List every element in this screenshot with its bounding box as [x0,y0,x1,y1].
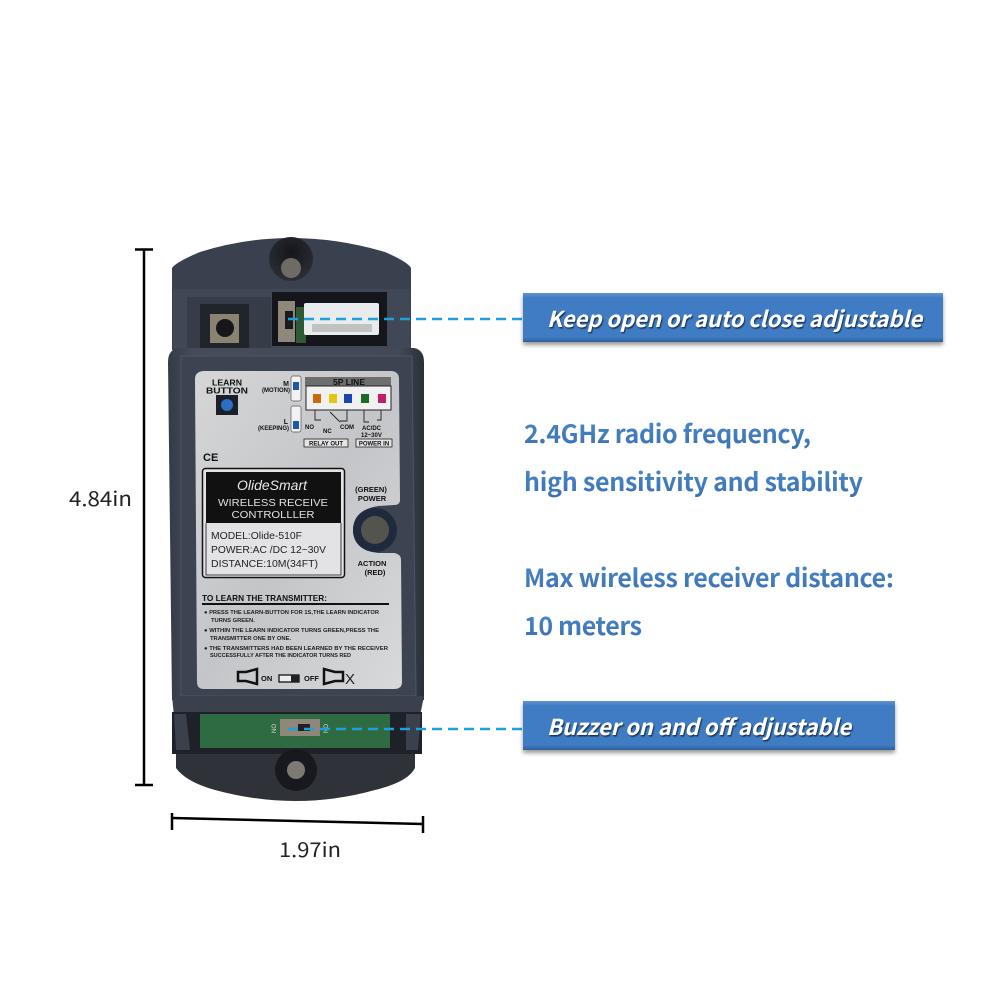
feature text: receiver distance [524,559,894,643]
dashed leader: buzzer switch [288,728,523,730]
callout: buzzer on and off: Buzzer on and off adjustable [547,710,853,742]
callout: keep open or auto close: Keep open or auto close adjustable [547,302,924,334]
buzzer on/off legend: ON [261,674,272,683]
mode switches: M [283,381,289,388]
5P line connector diagram: POWER IN [359,442,389,448]
learn button label [206,378,248,415]
learning instructions: TRANSMITTER ONE BY ONE. [210,636,291,642]
callout: keep open or auto close [523,293,943,342]
5P line connector diagram: NC [323,429,332,435]
green circuit board with buzzer switch: NO [324,724,330,733]
learning instructions: ● THE TRANSMITTERS HAD BEEN LEARNED BY THE RECEIVER [204,646,389,652]
5P line connector diagram: NO [305,425,314,431]
learning instructions [202,593,389,659]
bottom cap [172,712,422,801]
width label: 1.97in [279,834,341,863]
5P line connector diagram [304,377,392,448]
feature text: receiver distance: Max wireless receiver distance: [524,559,894,595]
learn button label: LEARN [212,378,242,388]
green circuit board with buzzer switch: NO [272,724,278,733]
5P line connector diagram: RELAY OUT [309,442,343,448]
product info box: POWER:AC /DC 12~30V [211,545,326,556]
body bevel [181,356,416,696]
mode switches [258,376,301,432]
product info box [202,468,344,578]
callout: buzzer on and off [523,701,895,750]
mode switches: L [284,419,289,426]
product info box: OlideSmart [237,477,308,493]
height dimension arrow [135,250,153,785]
height label: 4.84in [69,483,132,512]
5P line connector diagram: COM [340,425,354,431]
silver label plate [195,371,402,689]
status LED [353,508,397,552]
product info box: WIRELESS RECEIVE [218,497,328,509]
mode switches: (KEEPING) [258,426,289,432]
learning instructions: ● WITHIN THE LEARN INDICATOR TURNS GREEN,PRESS THE [204,628,379,634]
5P line connector diagram: AC/DC [362,426,382,432]
mode switches: (MOTION) [262,388,290,394]
top recess with learn button and terminal [173,289,410,349]
buzzer on/off legend [238,669,355,688]
5P line connector diagram: 12~30V [361,433,382,439]
dashed leader: keep open switch [288,318,523,320]
feature text: radio frequency: high sensitivity and stability [524,463,864,499]
learning instructions: ● PRESS THE LEARN-BUTTON FOR 1S,THE LEARN INDICATOR [204,610,380,616]
learning instructions: SUCCESSFULLY AFTER THE INDICATOR TURNS RED [210,653,351,659]
CE mark: CE [203,452,218,464]
learning instructions: TURNS GREEN. [211,618,255,624]
feature text: radio frequency [524,415,864,499]
device: wireless receive controller [168,237,424,801]
power indicator labels: POWER [358,494,387,503]
power indicator labels: ACTION [358,559,386,568]
feature text: receiver distance: 10 meters [524,607,642,643]
product info box: DISTANCE:10M(34FT) [211,559,318,570]
power indicator labels [355,485,387,577]
green circuit board with buzzer switch [200,714,390,748]
buzzer on/off legend: X [345,671,355,688]
learning instructions: TO LEARN THE TRANSMITTER: [202,593,327,603]
product info box: CONTROLLLER [232,509,315,521]
top mounting cap [172,237,411,350]
learn button label: BUTTON [206,386,248,396]
main body [168,348,424,700]
power indicator labels: (RED) [365,568,386,577]
5P line connector diagram: 5P LINE [333,377,365,387]
product info box: MODEL:Olide-510F [211,531,302,542]
lower body and bezel [172,696,424,716]
power indicator labels: (GREEN) [355,485,387,494]
feature text: radio frequency: 2.4GHz radio frequency, [524,415,811,451]
width dimension arrow [172,813,423,833]
buzzer on/off legend: OFF [304,674,319,683]
